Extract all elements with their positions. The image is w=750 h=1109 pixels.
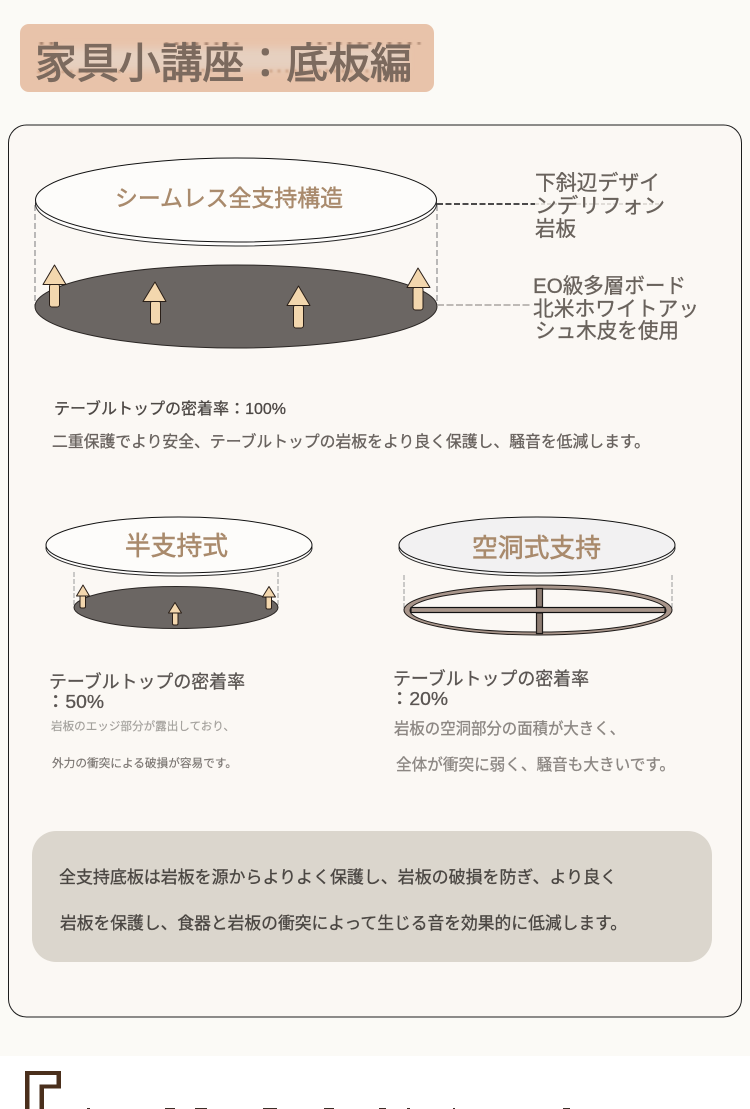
label: rock plate — [535, 172, 665, 241]
label: board: EO級多層ボード — [533, 275, 686, 298]
summary callout — [32, 831, 712, 962]
label: board — [533, 275, 699, 343]
text block: half support description: 岩板のエッジ部分が露出しており、 — [51, 719, 235, 733]
text block: hollow support description: ：20% — [390, 689, 448, 709]
summary callout: 岩板を保護し、食器と岩板の衝突によって生じる音を効果的に低減します。 — [60, 914, 627, 933]
heading: seamless full support: シームレス全支持構造 — [115, 185, 343, 211]
icon: bracket logo — [25, 1071, 61, 1109]
label: rock plate: 岩板 — [535, 218, 576, 241]
heading: half support: 半支持式 — [125, 531, 228, 561]
text block: hollow support description — [390, 668, 675, 774]
arrow: half support 1 — [76, 585, 90, 608]
text block: full support description: テーブルトップの密着率：100% — [54, 399, 286, 418]
label: board: シュ木皮を使用 — [535, 320, 679, 343]
text block: hollow support description: テーブルトップの密着率 — [393, 668, 589, 689]
arrow: support 1 — [43, 265, 66, 307]
text block: half support description: ：50% — [46, 692, 104, 712]
text block: full support description — [52, 399, 650, 451]
title banner — [20, 24, 434, 92]
diagram: hollow support — [399, 517, 675, 635]
text block: hollow support description: 全体が衝突に弱く、騒音も大きいです。 — [396, 756, 675, 774]
heading: hollow support: 空洞式支持 — [472, 533, 601, 563]
text block: half support description: 外力の衝突による破損が容易です。 — [52, 756, 237, 770]
text block: full support description: 二重保護でより安全、テーブルトップの岩板をより良く保護し、騒音を低減します。 — [52, 432, 650, 451]
next section heading tops — [87, 1108, 570, 1109]
label: rock plate: ンデリフォン — [535, 195, 665, 218]
arrow: half support 3 — [262, 586, 276, 609]
leader line: top plate — [437, 203, 660, 205]
diagram: seamless full support structure — [35, 158, 437, 348]
arrow: half support 2 — [168, 602, 182, 625]
arrow: support 4 — [407, 268, 430, 310]
text block: half support description: テーブルトップの密着率 — [49, 671, 245, 692]
leader line: bottom board — [437, 304, 531, 306]
text block: hollow support description: 岩板の空洞部分の面積が大きく、 — [394, 720, 625, 738]
text block: half support description — [46, 671, 245, 770]
diagram: half support — [46, 517, 312, 628]
title banner: 家具小講座：底板編 — [35, 40, 412, 87]
arrow: support 3 — [287, 286, 310, 328]
main panel — [8, 125, 742, 1017]
summary callout: 全支持底板は岩板を源からよりよく保護し、岩板の破損を防ぎ、より良く — [59, 868, 617, 887]
arrow: support 2 — [143, 282, 166, 324]
label: board: 北米ホワイトアッ — [533, 298, 699, 321]
label: rock plate: 下斜辺デザイ — [535, 172, 660, 195]
